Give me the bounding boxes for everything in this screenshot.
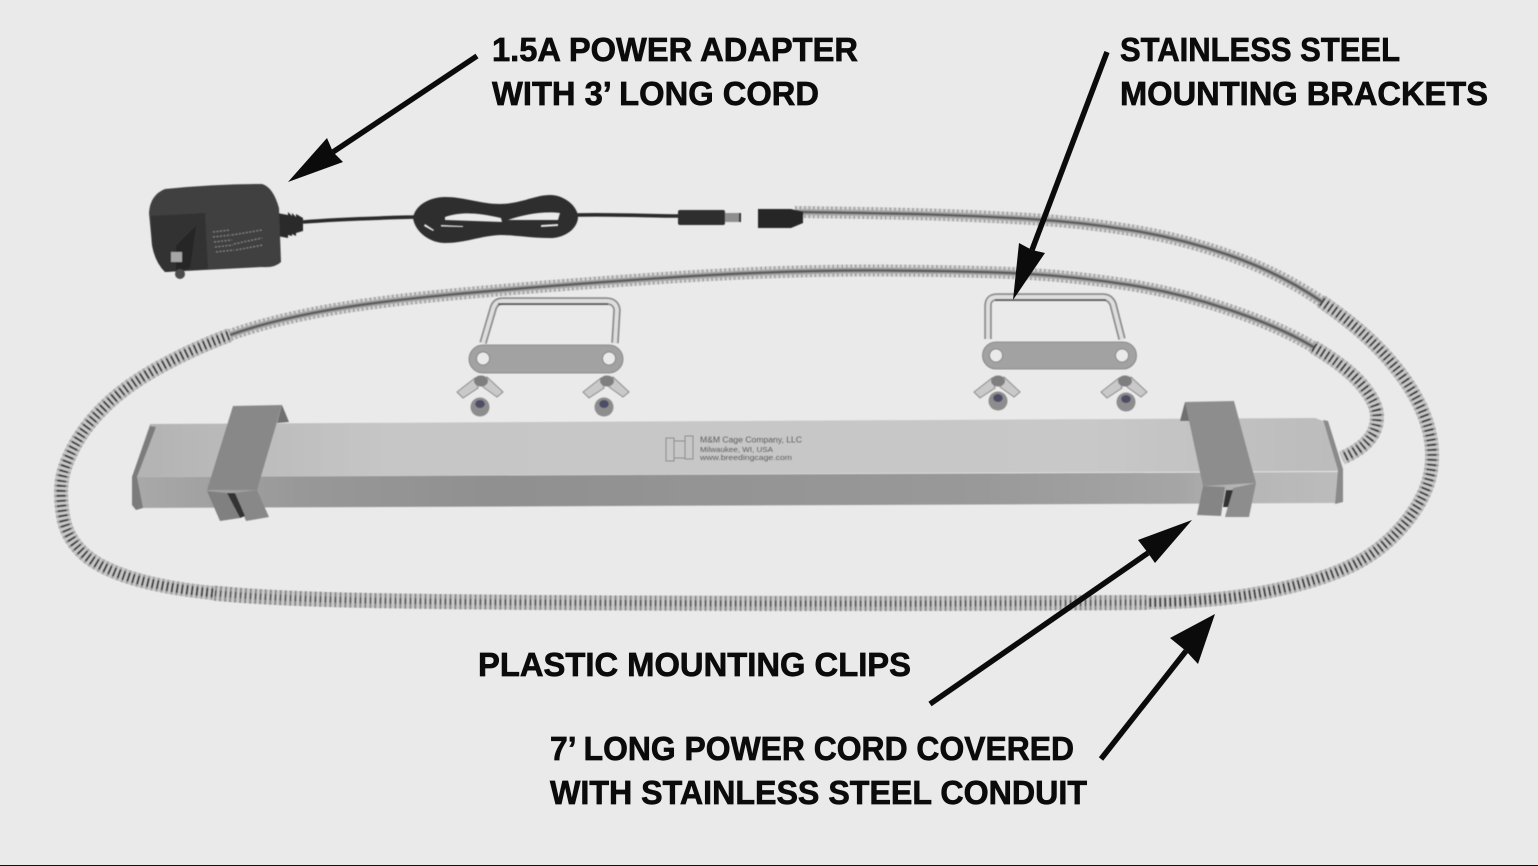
adapter strain relief [277, 212, 303, 238]
adapter body [149, 184, 281, 272]
label: power cord: 7’ LONG POWER CORD COVERED [550, 730, 1074, 767]
left mounting bracket [457, 301, 629, 416]
label: power adapter: WITH 3’ LONG CORD [492, 75, 819, 112]
label: mounting brackets: STAINLESS STEEL [1120, 31, 1400, 68]
right mounting bracket [974, 297, 1147, 412]
label: mounting brackets: MOUNTING BRACKETS [1120, 75, 1488, 112]
label: power cord: WITH STAINLESS STEEL CONDUIT [550, 774, 1087, 811]
label: power adapter: 1.5A POWER ADAPTER [492, 31, 858, 68]
adapter prongs [171, 226, 196, 279]
arrow: to mounting clip [930, 520, 1192, 704]
stainless steel conduit [61, 212, 1432, 604]
adapter front face [151, 213, 208, 272]
bar top face [132, 418, 1339, 477]
bar left end [132, 426, 156, 510]
adapter label markings [213, 230, 263, 252]
label: mounting brackets [1120, 31, 1488, 112]
female connector [758, 209, 803, 228]
arrow: to conduit [1101, 614, 1215, 759]
label: power cord [550, 730, 1087, 811]
arrow: to mounting bracket [1013, 52, 1107, 300]
bar manufacturer text: www.breedingcage.com [699, 453, 792, 462]
bottom edge line [0, 865, 1538, 866]
right clip [1180, 401, 1256, 517]
left clip [207, 405, 289, 521]
adapter cord [303, 215, 680, 222]
arrow: to power adapter [288, 56, 477, 182]
bar logo icon [666, 436, 693, 461]
male connector [678, 210, 741, 225]
label: power adapter [492, 31, 858, 112]
aluminium light bar [132, 401, 1343, 521]
cord coil [413, 195, 578, 243]
bar front face [132, 472, 1340, 508]
label: mounting clips: PLASTIC MOUNTING CLIPS [478, 646, 911, 683]
bar manufacturer text [699, 436, 802, 462]
bar manufacturer text: Milwaukee, WI, USA [700, 445, 773, 454]
power adapter [149, 184, 803, 279]
bar manufacturer text: M&M Cage Company, LLC [700, 436, 802, 444]
bar right end [1323, 420, 1343, 504]
